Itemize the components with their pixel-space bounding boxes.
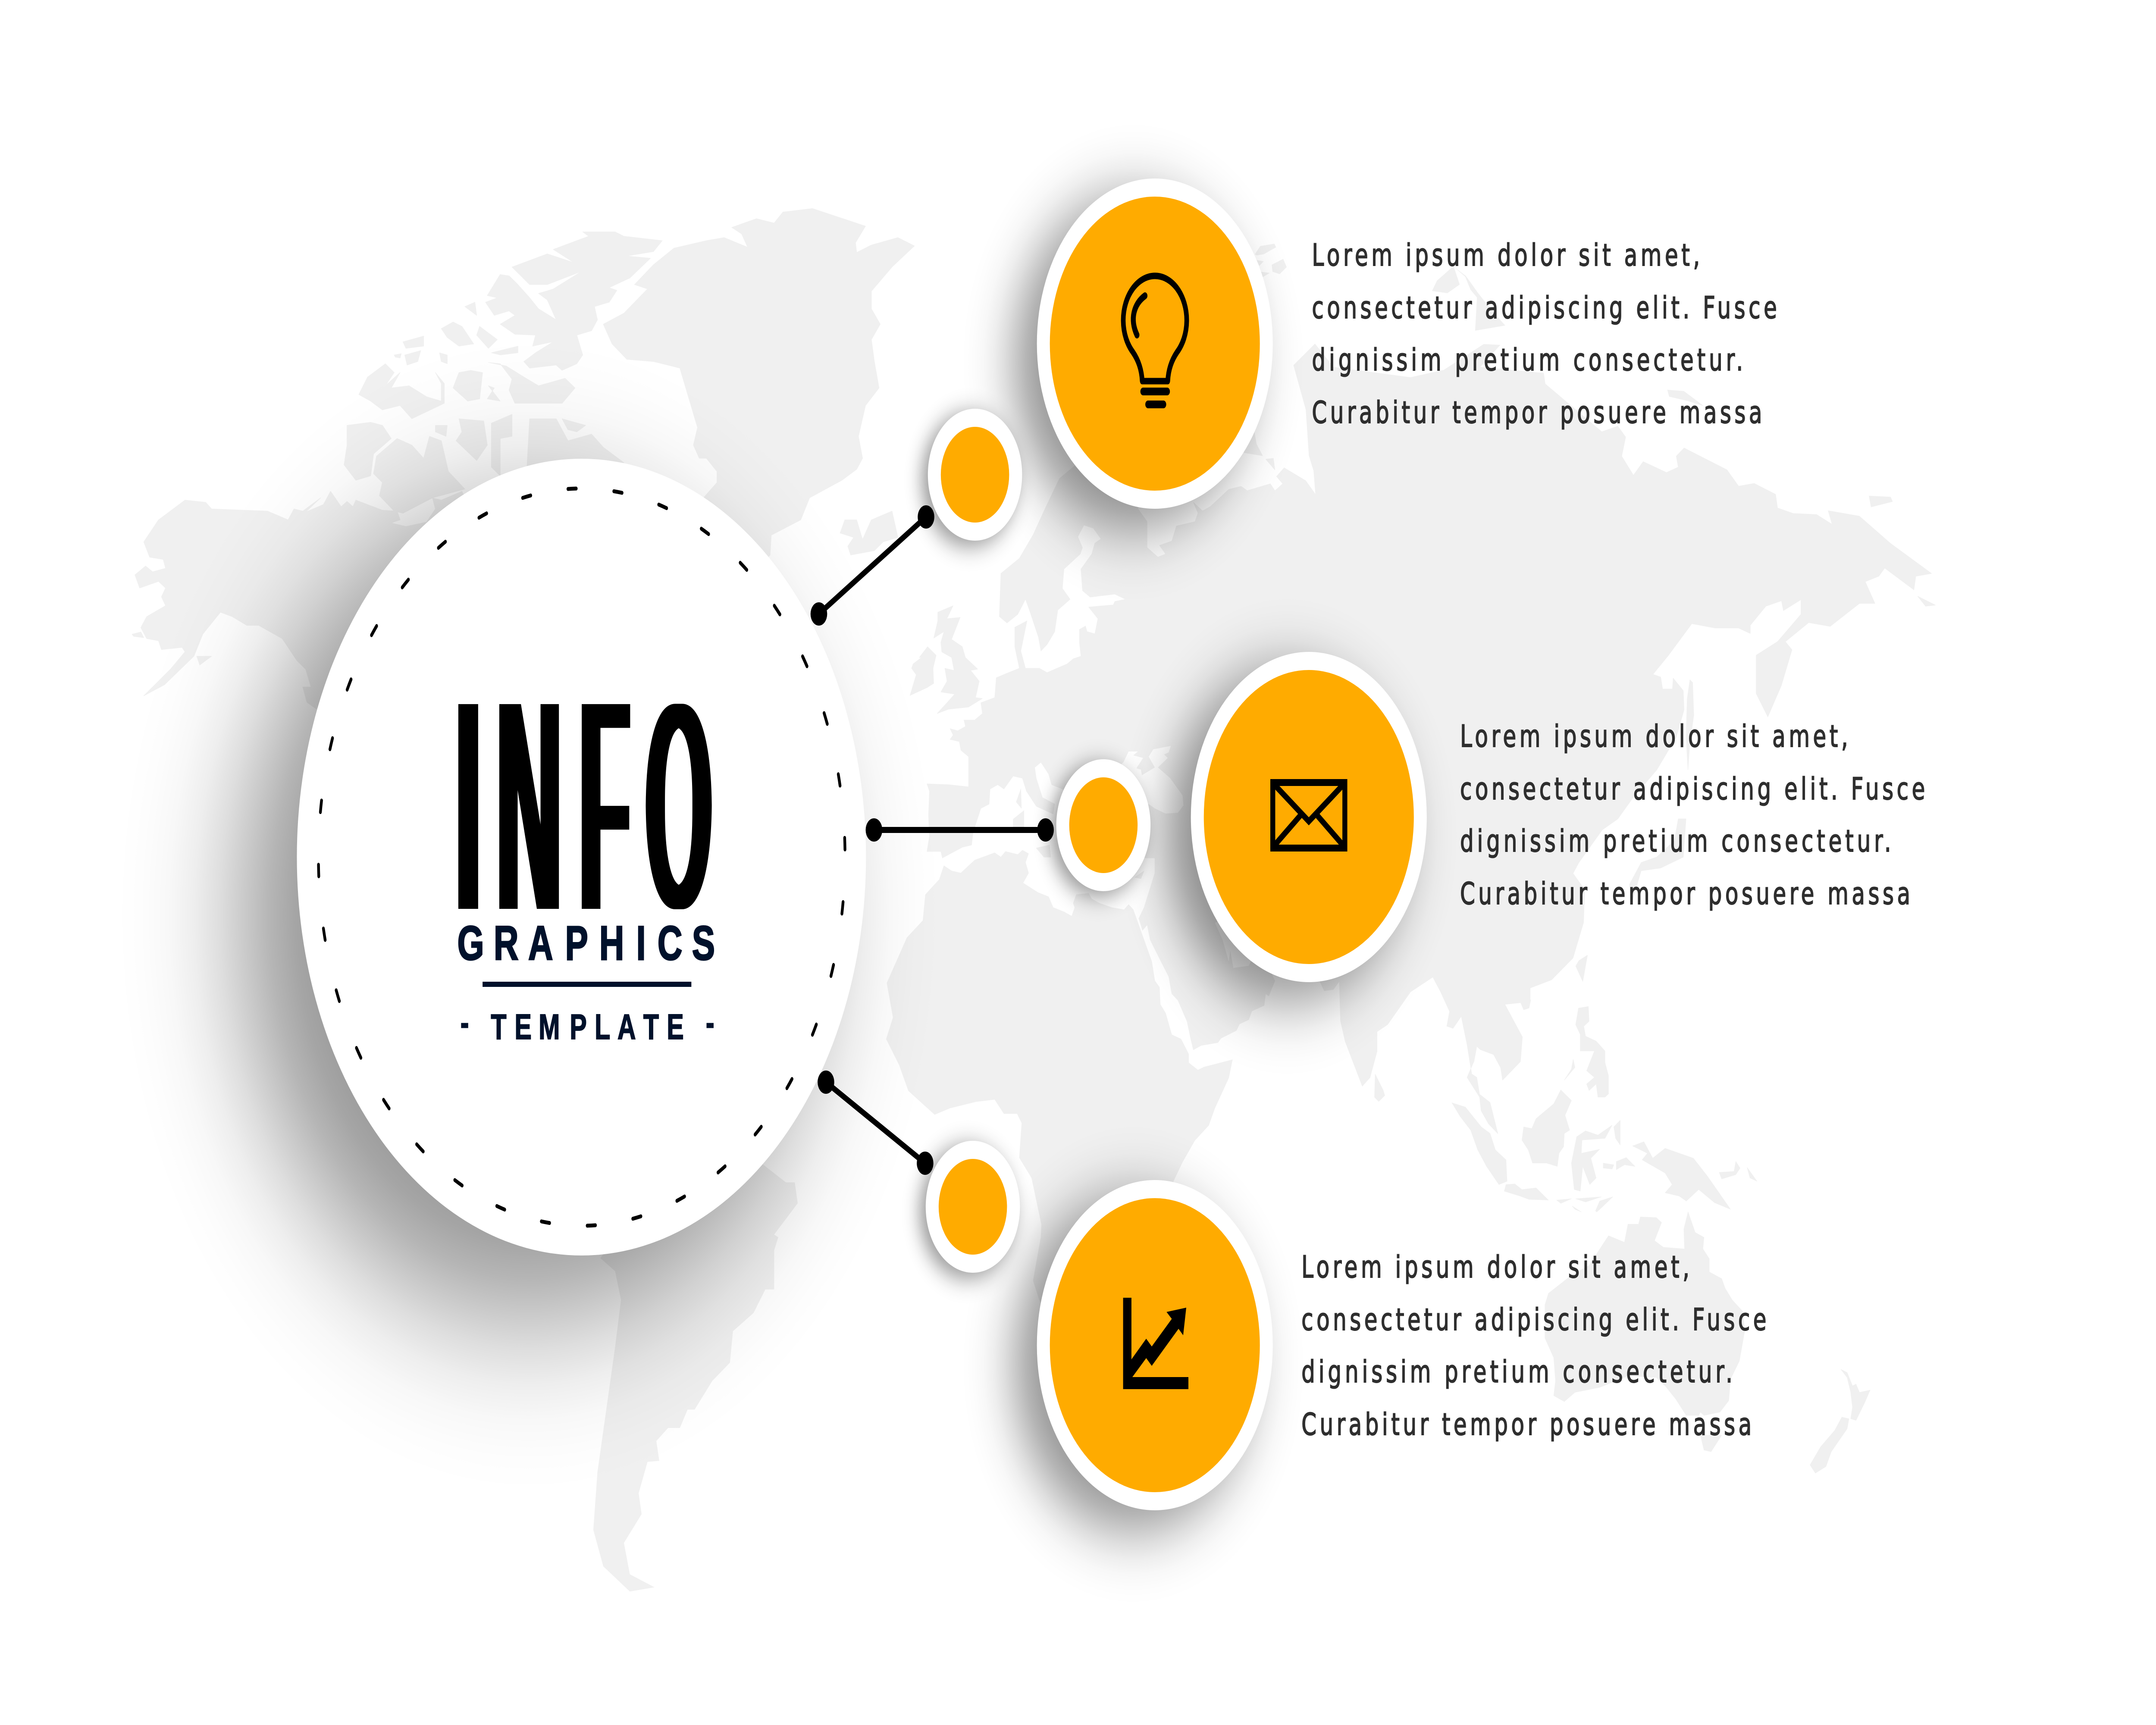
- South America: [593, 1164, 798, 1591]
- text block 3: dignissim pretium consectetur.: [1301, 1355, 1733, 1390]
- Africa: [886, 850, 1232, 1380]
- text block 2: [1460, 720, 1925, 911]
- text block 1: dignissim pretium consectetur.: [1312, 343, 1743, 378]
- connector line 2: [866, 818, 1054, 842]
- logo word: INFO: O: [646, 635, 712, 977]
- text block 3: [1301, 1250, 1767, 1442]
- logo word: INFO: N: [497, 631, 561, 981]
- logo word: TEMPLATE: TEMPLATE: [491, 1007, 684, 1047]
- text block 2: dignissim pretium consectetur.: [1460, 824, 1891, 859]
- Southeast Asia and Oceania: [1375, 1000, 1870, 1473]
- logo word: GRAPHICS: GRAPHICS: [458, 916, 715, 970]
- logo word: INFO: F: [580, 630, 630, 981]
- text block 2: Curabitur tempor posuere massa: [1460, 877, 1910, 911]
- text block 3: Lorem ipsum dolor sit amet,: [1301, 1250, 1689, 1285]
- logo word: INFO: [456, 630, 712, 981]
- dashed ring: [305, 470, 859, 1245]
- inland seas: [1109, 746, 1263, 968]
- Europe, Russia west and Arabia: [910, 414, 1386, 1050]
- connector line 3: [818, 1071, 934, 1175]
- text block 1: Curabitur tempor posuere massa: [1312, 396, 1762, 430]
- small connector circle 3: [901, 1119, 1034, 1305]
- text block 2: consectetur adipiscing elit. Fusce: [1460, 772, 1925, 807]
- text block 2: Lorem ipsum dolor sit amet,: [1460, 720, 1848, 754]
- large circle: growth: [962, 1124, 1305, 1605]
- text block 1: consectetur adipiscing elit. Fusce: [1312, 291, 1777, 326]
- text block 3: consectetur adipiscing elit. Fusce: [1301, 1303, 1767, 1337]
- text block 3: Curabitur tempor posuere massa: [1301, 1408, 1752, 1442]
- small connector circle 2: [1031, 737, 1164, 924]
- logo underline: [483, 982, 691, 987]
- small connector circle 1: [903, 387, 1036, 573]
- icon: light bulb: [1123, 276, 1187, 408]
- large circle: mail: [1116, 595, 1459, 1077]
- Asia: [1267, 388, 1935, 1133]
- connector line 1: [811, 505, 934, 626]
- logo word: INFO: I: [456, 631, 481, 981]
- icon: envelope: [1273, 783, 1345, 848]
- Arctic islands near Russia: [1255, 244, 1287, 278]
- world map background: [132, 209, 1935, 1591]
- icon: growth chart: [1123, 1298, 1188, 1389]
- logo: [456, 630, 715, 1047]
- text block 1: [1312, 238, 1777, 430]
- panel: main white circle: [117, 339, 940, 1492]
- large circle: idea: [962, 122, 1305, 603]
- North America and Arctic islands: [132, 209, 915, 744]
- logo word: TEMPLATE: -: [706, 1003, 714, 1043]
- text block 1: Lorem ipsum dolor sit amet,: [1312, 238, 1700, 273]
- Siberia north coast: [1294, 266, 1704, 647]
- logo word: TEMPLATE: -: [461, 1003, 469, 1043]
